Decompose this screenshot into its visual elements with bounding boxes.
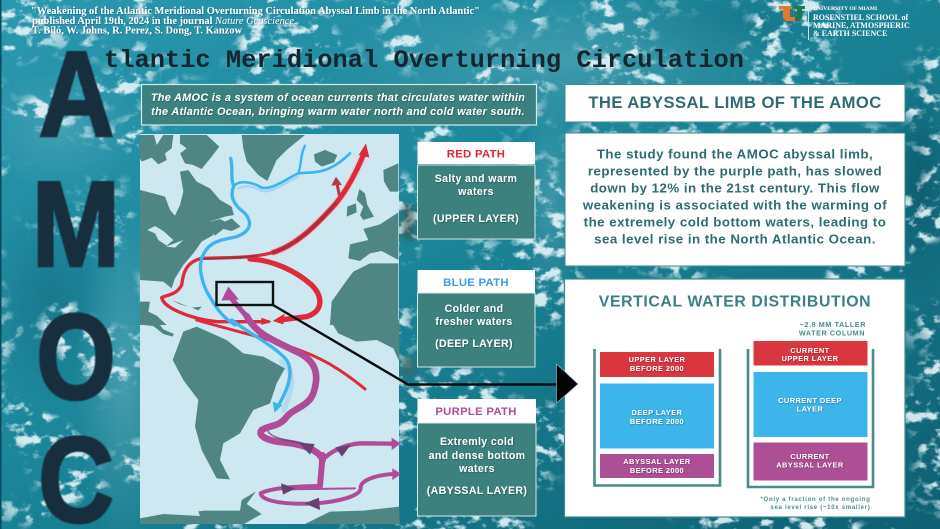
- connector arrow from map box to distribution panel: [216, 282, 578, 403]
- legend: blue path: (DEEP LAYER): [435, 338, 513, 350]
- legend: red path: [418, 142, 535, 239]
- intro callout: The AMOC is a system of ocean currents that circulates water within: [151, 92, 525, 104]
- university logo: [779, 5, 910, 40]
- citation header: T. Biló, W. Johns, R. Perez, S. Dong, T. Kanzow: [32, 26, 242, 36]
- column current: CURRENT: [790, 346, 830, 355]
- column before 2000: BEFORE 2000: [630, 466, 684, 475]
- column before 2000: [594, 349, 720, 486]
- university logo: UNIVERSITY OF MIAMI: [813, 6, 877, 12]
- intro callout: [142, 84, 536, 125]
- big AMOC acronym: A: [39, 27, 114, 163]
- legend: purple path: (ABYSSAL LAYER): [427, 485, 527, 497]
- taller column note: WATER COLUMN: [799, 328, 865, 338]
- ocean current map: [140, 134, 401, 524]
- column current: ABYSSAL LAYER: [776, 460, 844, 470]
- legend: red path: RED PATH: [447, 148, 505, 160]
- legend: blue path: BLUE PATH: [443, 277, 509, 289]
- column current: CURRENT DEEP: [778, 396, 842, 405]
- column before 2000: DEEP LAYER: [632, 408, 683, 417]
- footnote: sea level rise (~10x smaller): [770, 505, 870, 511]
- taller column note: ~2.8 MM TALLER: [800, 320, 866, 329]
- legend: red path: Salty and warm: [435, 173, 517, 185]
- legend: blue path: [418, 270, 535, 367]
- title: tlantic Meridional Overturning Circulation: [104, 46, 744, 75]
- red path: [162, 143, 401, 510]
- study summary panel: The study found the AMOC abyssal limb,: [597, 146, 873, 162]
- intro callout: the Atlantic Ocean, bringing warm water north and cold water south.: [151, 106, 525, 118]
- study summary panel: the extremely cold bottom waters, leading to: [584, 214, 886, 230]
- taller column note: [799, 320, 866, 338]
- legend: blue path: Colder and: [445, 303, 503, 315]
- legend: purple path: and dense bottom: [429, 450, 525, 462]
- heading panel: abyssal limb: [565, 84, 905, 122]
- great lakes: [147, 226, 183, 248]
- heading panel: abyssal limb: THE ABYSSAL LIMB OF THE AMOC: [588, 93, 882, 112]
- university logo: MARINE, ATMOSPHERIC: [813, 21, 910, 30]
- citation header: published April 19th, 2024 in the journal Nature Geoscience.: [32, 16, 297, 27]
- column before 2000: BEFORE 2000: [630, 364, 684, 373]
- purple path: [221, 287, 254, 325]
- legend: red path: waters: [457, 186, 494, 198]
- citation header: [31, 6, 480, 36]
- column before 2000: UPPER LAYER: [629, 355, 686, 364]
- big AMOC acronym: M: [32, 156, 120, 293]
- column current: CURRENT: [790, 452, 830, 461]
- university logo: & EARTH SCIENCE: [813, 29, 887, 38]
- column current: [748, 341, 873, 487]
- column current: LAYER: [797, 404, 824, 414]
- column before 2000: BEFORE 2000: [630, 417, 684, 426]
- study summary panel: [565, 133, 905, 266]
- panel heading: VERTICAL WATER DISTRIBUTION: [599, 294, 871, 310]
- footnote: [760, 497, 870, 511]
- legend: purple path: PURPLE PATH: [435, 406, 517, 418]
- big AMOC acronym: [32, 27, 120, 529]
- study summary panel: represented by the purple path, has slowed: [588, 164, 882, 178]
- vertical water distribution panel: [564, 279, 905, 517]
- study summary panel: down by 12% in the 21st century. This flow: [590, 180, 880, 196]
- legend: purple path: [418, 399, 536, 516]
- legend: purple path: waters: [458, 463, 495, 475]
- legend: red path: (UPPER LAYER): [433, 213, 519, 225]
- study summary panel: weakening is associated with the warming of: [582, 198, 887, 212]
- university logo: ROSENSTIEL SCHOOL of: [813, 13, 908, 22]
- blue path: [200, 146, 350, 325]
- legend: purple path: Extremly cold: [440, 436, 514, 448]
- land masses: [140, 135, 399, 524]
- study summary panel: sea level rise in the North Atlantic Ocean.: [594, 232, 876, 246]
- legend: blue path: fresher waters: [435, 316, 513, 328]
- footnote: *Only a fraction of the ongoing: [760, 497, 870, 503]
- column current: UPPER LAYER: [782, 354, 839, 363]
- big AMOC acronym: O: [36, 289, 116, 425]
- column before 2000: ABYSSAL LAYER: [623, 457, 691, 466]
- citation header: "Weakening of the Atlantic Meridional Overturning Circulation Abyssal Limb in the North Atlantic": [31, 6, 480, 17]
